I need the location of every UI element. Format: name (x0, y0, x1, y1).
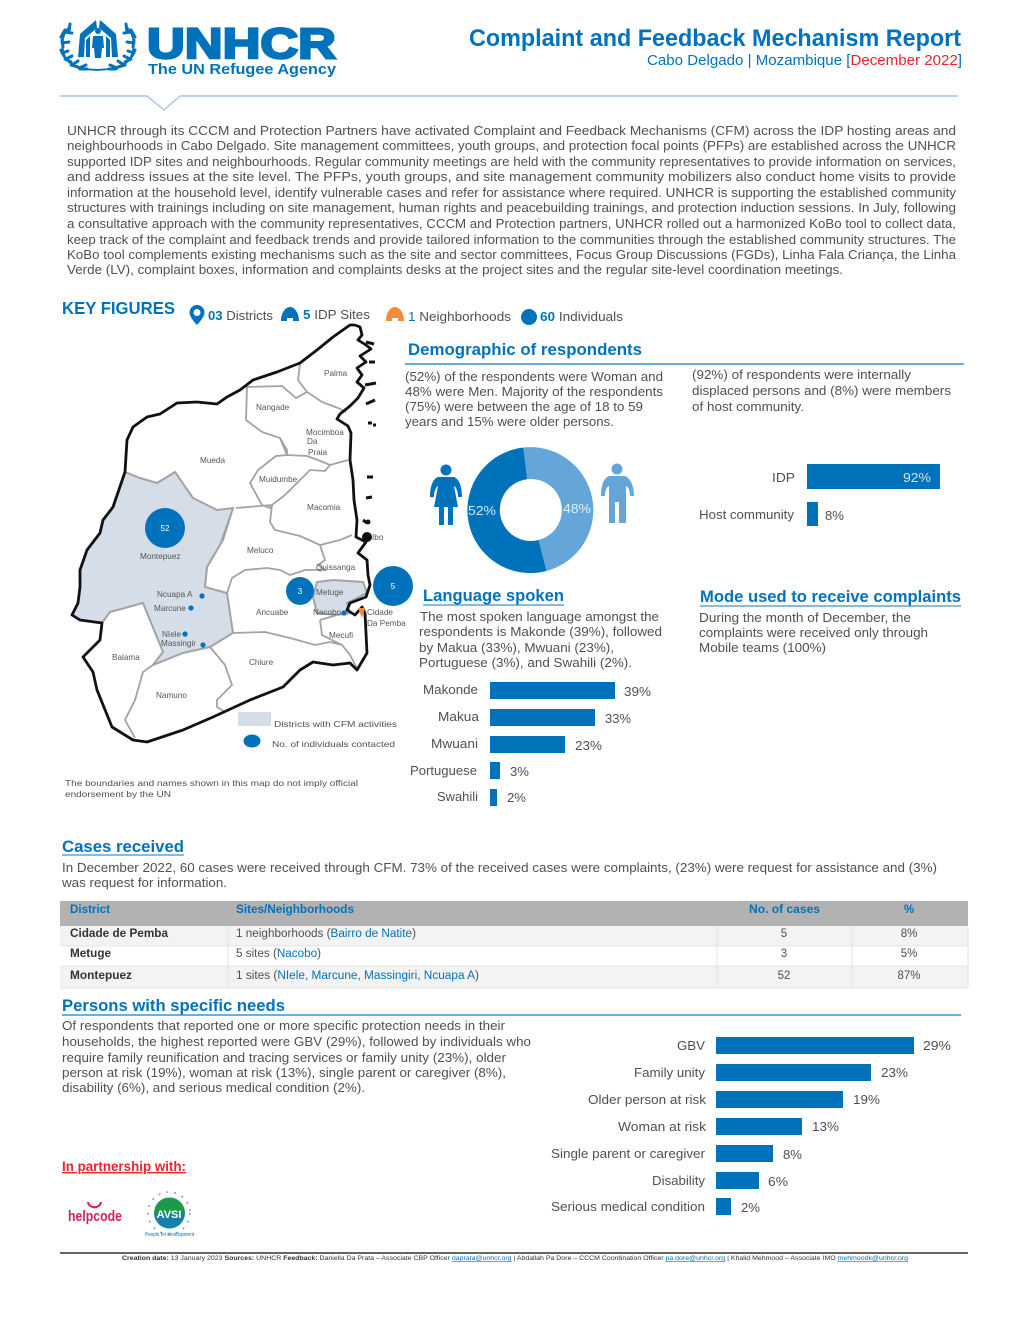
partners block (62, 1158, 195, 1238)
district labels: Mecufi (329, 631, 353, 640)
table: cases by district: 1 neighborhoods (Bairro de Natite) (236, 928, 416, 940)
text: specific needs summary: disability (6%), and serious medical condition (2%). (62, 1080, 365, 1095)
stat: IDP sites: 5 IDP Sites (303, 307, 371, 322)
map legend: No. of individuals contacted (272, 739, 395, 749)
district labels: Macomia (307, 503, 341, 512)
wordmark: UNHCR (147, 20, 336, 68)
intro paragraph: UNHCR through its CCCM and Protection Partners have activated Complaint and Feedback Mechanisms (CFM) across the IDP hosting areas and (67, 124, 956, 138)
key figures strip (62, 298, 624, 325)
bar chart: specific needs: 2% (741, 1200, 760, 1215)
intro paragraph: a consultative approach with the community representatives, CCCM and Protection partners, UNHCR rolled out a harmonized KoBo tool to collect data, (67, 217, 956, 231)
table: cases by district: 8% (901, 928, 917, 940)
bar chart: specific needs: 19% (853, 1092, 880, 1107)
text: language summary: respondents is Makonde (39%), followed (419, 624, 662, 639)
heading: Cases received (62, 837, 184, 856)
bar chart: specific needs: Older person at risk (588, 1092, 707, 1107)
coastline and provincial border (72, 325, 371, 742)
Pemba marker (358, 608, 365, 618)
district labels: Ibo (372, 533, 384, 542)
bar chart: languages: 3% (510, 764, 529, 779)
text: specific needs summary: Of respondents that reported one or more specific protection needs in their (62, 1018, 506, 1033)
text: specific needs summary: person at risk (19%), woman at risk (13%), single parent or caregiver (8%), (62, 1065, 506, 1080)
bar chart: specific needs: Family unity (634, 1065, 706, 1080)
bar chart: displacement status: 8% (825, 508, 844, 523)
map: Cabo Delgado districts (72, 325, 413, 749)
table: cases by district: 5 sites (Nacobo) (236, 948, 321, 960)
table: cases by district: 87% (897, 970, 921, 982)
text: displacement status: (92%) of respondents were internally (692, 367, 912, 382)
district boundaries (125, 363, 357, 738)
bar chart: languages: Portuguese (410, 763, 477, 778)
footer rule (60, 1252, 968, 1254)
text: gender and age: years and 15% were older persons. (405, 414, 614, 429)
icon: laurel wreath and sheltering hands (61, 20, 135, 70)
panel: language spoken (410, 586, 662, 806)
icon: neighbourhood shelter (386, 307, 404, 321)
bar chart: displacement status: 92% (903, 470, 931, 485)
table: cases by district: 1 sites (NIele, Marcune, Massingiri, Ncuapa A ) (236, 970, 479, 982)
bubble: Metuge 3: 3 (298, 587, 303, 596)
intro paragraph: KoBo tool complements existing mechanisms such as the site and sector committees, Focus Group Discussions (FGDs), Linha Fala Criança, the Linha (67, 248, 956, 262)
bar chart: languages: Makua (438, 709, 480, 724)
table: cases by district: 5 (781, 928, 787, 940)
district labels: Muidumbe (259, 475, 298, 484)
heading: Mode used to receive complaints (700, 587, 961, 606)
report title: Complaint and Feedback Mechanism Report (469, 25, 961, 52)
district labels: Namuno (156, 691, 187, 700)
Montepuez shaded district (72, 472, 233, 665)
heading: Persons with specific needs (62, 996, 285, 1015)
text: displacement status (692, 367, 952, 414)
text: gender and age: (75%) were between the age of 18 to 59 (405, 399, 643, 414)
logo: helpcode: helpcode (68, 1208, 122, 1225)
district labels: Nacobo (313, 608, 342, 617)
map disclaimer (65, 778, 358, 799)
text: gender and age: 48% were Men. Majority of the respondents (405, 384, 664, 399)
bubble: Metuge 3 (286, 577, 314, 605)
bubble: Cidade de Pemba 5: 5 (391, 582, 396, 591)
icon: man (601, 464, 634, 523)
bar chart: displacement status: Host community (699, 507, 794, 522)
heading: key figures: KEY FIGURES (62, 298, 175, 318)
bar chart: languages: 23% (575, 738, 602, 753)
panel: persons with specific needs (62, 996, 961, 1215)
bar chart: specific needs: 6% (768, 1174, 788, 1189)
panel: mode used to receive complaints (699, 587, 961, 655)
bar chart: specific needs: 23% (881, 1065, 908, 1080)
UNHCR logo (61, 20, 337, 78)
text: gender and age: (52%) of the respondents were Woman and (405, 369, 663, 384)
district labels: Mueda (200, 456, 225, 465)
district labels: Ncuapa A (157, 590, 193, 599)
bar chart: displacement status: IDP (772, 470, 795, 485)
text: language summary: The most spoken language amongst the (420, 609, 659, 624)
footer credits: Creation date: 13 January 2023 Sources: UNHCR Feedback: Daniella Da Prata – Associate CBP Officer daprata@unhcr.org | Abdallah Pa Dore – CCCM Coordination Officer pa.dore@unhcr.org | Khalid Mehmood – Associate IMO mehmoodk@unhcr.org (122, 1255, 909, 1262)
logo: AVSI: AVSI (157, 1209, 181, 1221)
text: specific needs summary: households, the highest reported were GBV (29%), followed by individuals who (62, 1034, 531, 1049)
intro paragraph: and address issues at the site level. The PFPs, youth groups, and site management community mobilizers also conduct home visits to provide (67, 170, 956, 184)
text: language summary (419, 609, 662, 670)
icon: location pin (190, 305, 204, 325)
district labels: Meluco (247, 546, 274, 555)
text: complaint mode: Mobile teams (100%) (699, 640, 826, 655)
table: cases by district: Montepuez (70, 970, 132, 982)
table: cases by district: % (904, 904, 914, 916)
intro paragraph: supported IDP sites and neighbourhoods. Regular community meetings are held with the community representatives to provide information on services, (67, 155, 956, 169)
donut chart: gender: 48% (563, 501, 591, 516)
bar chart: specific needs: Disability (652, 1173, 706, 1188)
text: language summary: Portuguese (3%), and Swahili (2%). (419, 655, 632, 670)
text: cases summary: In December 2022, 60 cases were received through CFM. 73% of the received cases were complaints, (23%) were request for assistance and (3%) (62, 860, 937, 875)
bar chart: languages: 39% (624, 684, 651, 699)
map legend: Districts with CFM activities (274, 719, 397, 729)
panel: demographic of respondents (405, 340, 964, 573)
district labels (112, 369, 406, 700)
intro paragraph: keep track of the complaint and feedback trends and provide tailored information to the communities through the established community structures. The (67, 233, 956, 247)
table: cases by district: Cidade de Pemba (70, 928, 169, 940)
logo: AVSI: People for development (145, 1232, 195, 1238)
district labels: Montepuez (140, 552, 181, 561)
table: cases by district (60, 901, 968, 988)
table: cases by district: 3 (781, 948, 787, 960)
stat: districts: 03 Districts (208, 308, 273, 323)
table: cases by district: Sites/Neighborhoods (236, 904, 354, 916)
text: specific needs summary: require family reunification and tracing services or family unity (23%), older (62, 1050, 507, 1065)
district labels: Quissanga (316, 563, 356, 572)
bar chart: specific needs: 13% (812, 1119, 839, 1134)
district labels: NIele (162, 630, 182, 639)
bar chart: specific needs (551, 1037, 951, 1215)
bubble: Cidade de Pemba 5 (373, 566, 413, 606)
map disclaimer: endorsement by the UN (65, 789, 171, 799)
map disclaimer: The boundaries and names shown in this map do not imply official (65, 778, 358, 788)
text: cases summary (61, 860, 937, 890)
district labels: Metuge (316, 588, 344, 597)
district labels: Da (307, 437, 318, 446)
stat: neighbourhoods: 1 Neighborhoods (408, 309, 512, 324)
district labels: Chiure (249, 658, 274, 667)
text: specific needs summary (62, 1018, 531, 1095)
text: language summary: by Makua (33%), Mwuani (23%), (419, 640, 614, 655)
text: complaint mode: During the month of December, the (699, 610, 911, 625)
logo: AVSI (145, 1192, 195, 1238)
bar chart: languages: 33% (605, 711, 631, 726)
bar chart: languages: 2% (507, 790, 526, 805)
text: gender and age (405, 369, 664, 429)
intro paragraph: Verde (LV), complaint boxes, information and complaints desks at the project sites and the regular site-level coordination meetings. (67, 263, 843, 277)
stat: individuals: 60 Individuals (540, 309, 624, 324)
donut chart: gender: 52% (468, 503, 496, 518)
intro paragraph: structures with trainings including on site management, human rights and peacebuilding trainings, and protection induction sessions. In July, following (67, 201, 956, 215)
table: cases by district: District (70, 904, 110, 916)
district labels: Praia (308, 448, 328, 457)
district labels: Palma (324, 369, 348, 378)
intro paragraph: information at the household level, identify vulnerable cases and refer for assistance where required. UNHCR is supporting the established community (67, 186, 957, 200)
bubble: Montepuez 52 (145, 508, 185, 548)
bar chart: languages: Makonde (423, 682, 478, 697)
bar chart: displacement status (699, 464, 940, 526)
heading: Language spoken (423, 586, 564, 605)
tagline: The UN Refugee Agency (148, 61, 337, 78)
table: cases by district: 52 (778, 970, 790, 982)
map legend (238, 712, 397, 749)
Metuge shaded district (313, 580, 367, 615)
text: displacement status: displaced persons and (8%) were members (692, 383, 952, 398)
icon: IDP shelter (281, 307, 299, 321)
bar chart: specific needs: 29% (923, 1038, 951, 1053)
bar chart: specific needs: Woman at risk (618, 1119, 707, 1134)
table: cases by district: Metuge (70, 948, 111, 960)
intro paragraph: neighbourhoods in Cabo Delgado. Site management committees, youth groups, and protection focal points (PFPs) are established across the UNHCR (67, 139, 956, 153)
bubble: Montepuez 52: 52 (161, 524, 170, 533)
text: cases summary: was request for information. (61, 875, 227, 890)
district labels: Ancuabe (256, 608, 289, 617)
bar chart: languages (410, 682, 651, 806)
icon: individuals circle (521, 309, 537, 325)
district labels: Marcune (154, 604, 186, 613)
heading: Demographic of respondents (408, 340, 642, 359)
text: displacement status: of host community. (692, 399, 804, 414)
district labels: Balama (112, 653, 140, 662)
bar chart: specific needs: Serious medical condition (551, 1199, 705, 1214)
table: cases by district: No. of cases (749, 904, 820, 916)
icon: woman (430, 464, 462, 525)
district labels: Da Pemba (367, 619, 406, 628)
district labels: Cidade (367, 608, 393, 617)
district labels: Nangade (256, 403, 290, 412)
bar chart: languages: Swahili (437, 789, 478, 804)
text: complaint mode (699, 610, 928, 655)
bar chart: specific needs: Single parent or caregiver (551, 1146, 706, 1161)
bar chart: specific needs: 8% (783, 1147, 802, 1162)
panel: cases received (60, 837, 968, 988)
donut chart: gender (467, 447, 593, 573)
header rule with notch (60, 96, 958, 110)
site dots (182, 593, 347, 648)
bar chart: specific needs: GBV (677, 1038, 705, 1053)
heading: in partnership with: In partnership with: (62, 1158, 186, 1174)
table: cases by district: 5% (901, 948, 917, 960)
district labels: Massingir (161, 639, 196, 648)
text: complaint mode: complaints were received only through (699, 625, 928, 640)
intro paragraph (67, 124, 957, 277)
bar chart: languages: Mwuani (431, 736, 478, 751)
district labels: Mocimboa (306, 428, 344, 437)
subtitle: Cabo Delgado | Mozambique [December 2022] (647, 52, 962, 69)
